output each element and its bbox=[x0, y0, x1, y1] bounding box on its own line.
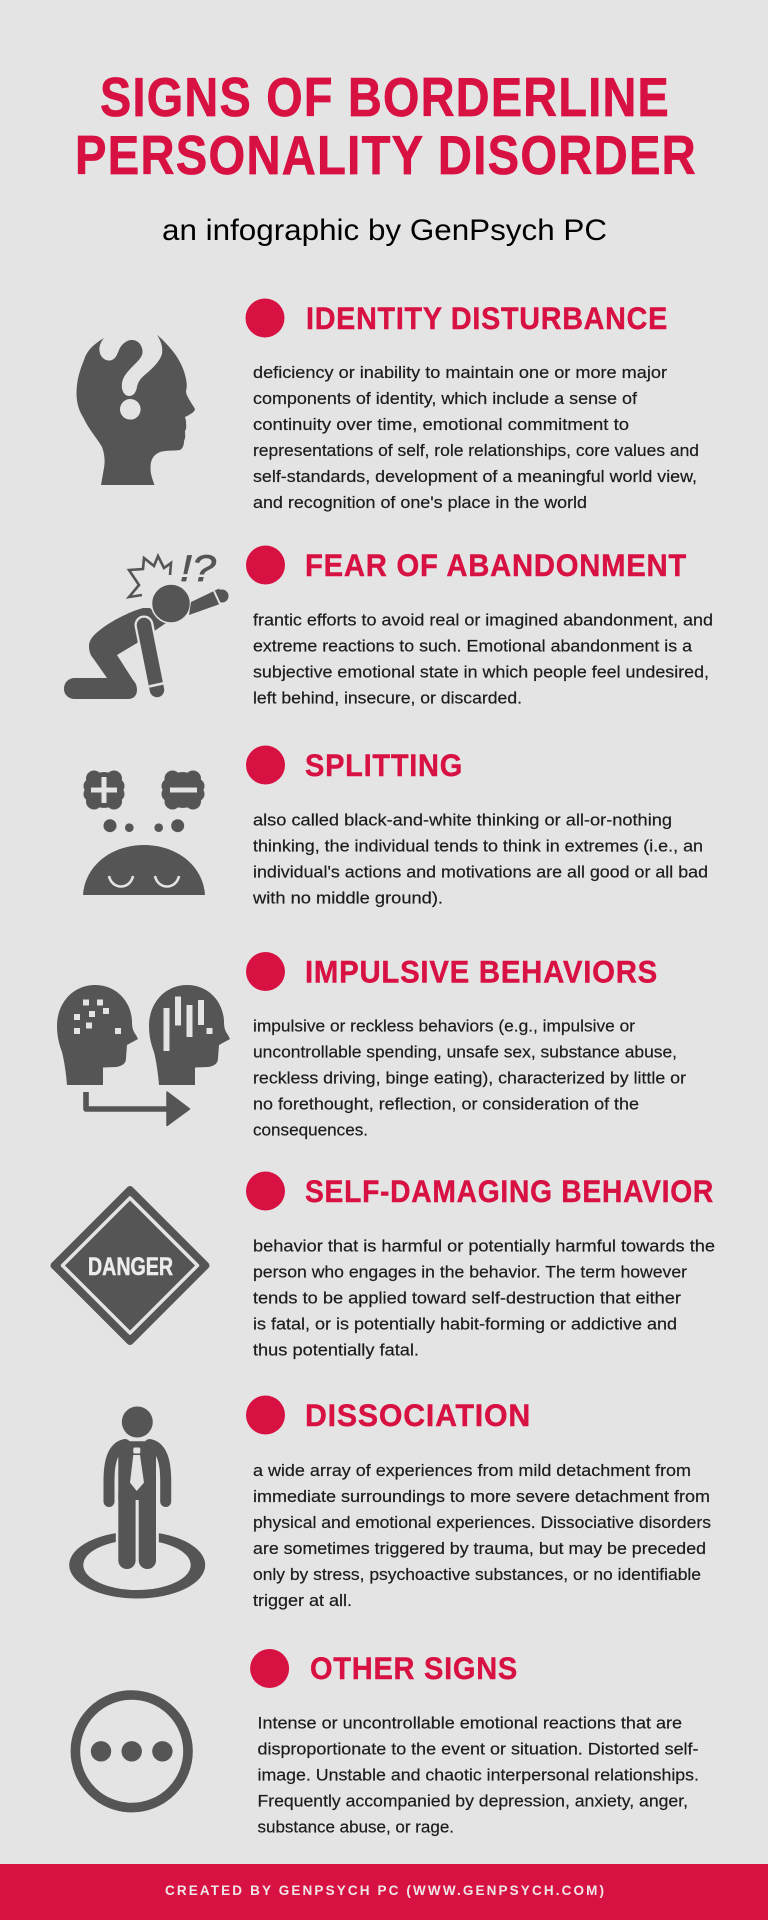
body text: immediate surroundings to more severe detachment from bbox=[253, 1487, 710, 1506]
body text: frantic efforts to avoid real or imagined abandonment, and bbox=[253, 610, 713, 630]
body text: reckless driving, binge eating), characterized by little or bbox=[253, 1068, 686, 1088]
heading: IMPULSIVE BEHAVIORS bbox=[305, 954, 658, 990]
title: SIGNS OF BORDERLINE bbox=[100, 66, 670, 128]
panel: splitting bbox=[83, 746, 708, 908]
body text: only by stress, psychoactive substances, or no identifiable bbox=[253, 1565, 701, 1584]
body text: individual's actions and motivations are all good or all bad bbox=[253, 862, 708, 882]
icon: kneeling person with exclamation bbox=[64, 548, 228, 699]
body text: is fatal, or is potentially habit-forming or addictive and bbox=[253, 1314, 677, 1334]
body text bbox=[253, 363, 699, 512]
body text bbox=[253, 1461, 711, 1610]
body text: thus potentially fatal. bbox=[253, 1340, 419, 1360]
icon: two heads with arrow bbox=[57, 985, 230, 1126]
body text bbox=[253, 610, 713, 708]
heading: SELF-DAMAGING BEHAVIOR bbox=[305, 1173, 714, 1209]
panel: self-damaging behavior bbox=[54, 1172, 715, 1360]
body text: tends to be applied toward self-destruction that either bbox=[253, 1288, 681, 1308]
bullet bbox=[246, 546, 285, 584]
body text: self-standards, development of a meaningful world view, bbox=[253, 467, 697, 486]
body text: extreme reactions to such. Emotional abandonment is a bbox=[253, 636, 693, 656]
heading: SPLITTING bbox=[305, 747, 463, 783]
footer bar: CREATED BY GENPSYCH PC (WWW.GENPSYCH.COM) bbox=[165, 1883, 604, 1898]
body text: physical and emotional experiences. Dissociative disorders bbox=[253, 1513, 711, 1532]
body text bbox=[258, 1714, 699, 1836]
body text: and recognition of one's place in the world bbox=[253, 493, 587, 512]
body text bbox=[252, 810, 708, 908]
panel: impulsive behaviors bbox=[57, 952, 686, 1140]
body text: are sometimes triggered by trauma, but may be preceded bbox=[253, 1539, 706, 1558]
body text: components of identity, which include a sense of bbox=[253, 389, 637, 408]
bullet bbox=[246, 1172, 285, 1210]
icon: face with plus and minus thoughts bbox=[83, 770, 205, 895]
body text: person who engages in the behavior. The term however bbox=[253, 1262, 687, 1282]
panel: fear of abandonment bbox=[64, 546, 713, 708]
body text: image. Unstable and chaotic interpersonal relationships. bbox=[258, 1766, 699, 1784]
body text: a wide array of experiences from mild detachment from bbox=[253, 1461, 691, 1480]
panel: identity disturbance bbox=[76, 298, 699, 512]
heading: DISSOCIATION bbox=[305, 1397, 531, 1433]
body text: deficiency or inability to maintain one or more major bbox=[253, 363, 667, 382]
body text: Frequently accompanied by depression, anxiety, anger, bbox=[258, 1792, 688, 1810]
subtitle: an infographic by GenPsych PC bbox=[162, 214, 607, 247]
body text: with no middle ground). bbox=[252, 888, 443, 908]
icon: man standing in ring bbox=[69, 1406, 205, 1598]
footer bar bbox=[0, 1864, 768, 1920]
panel: other signs bbox=[75, 1649, 699, 1836]
icon: danger sign bbox=[54, 1190, 206, 1342]
body text: substance abuse, or rage. bbox=[258, 1818, 454, 1836]
body text: disproportionate to the event or situation. Distorted self- bbox=[258, 1740, 698, 1758]
body text: trigger at all. bbox=[253, 1591, 352, 1610]
body text bbox=[253, 1016, 686, 1140]
icon: kneeling person with exclamation: !? bbox=[180, 548, 216, 589]
body text bbox=[253, 1236, 715, 1360]
body text: left behind, insecure, or discarded. bbox=[253, 688, 522, 708]
icon: danger sign: DANGER bbox=[88, 1253, 173, 1281]
body text: representations of self, role relationships, core values and bbox=[253, 441, 699, 460]
body text: Intense or uncontrollable emotional reactions that are bbox=[258, 1714, 682, 1732]
body text: impulsive or reckless behaviors (e.g., impulsive or bbox=[253, 1016, 635, 1036]
panel: dissociation bbox=[69, 1396, 711, 1610]
bullet bbox=[246, 298, 284, 338]
body text: behavior that is harmful or potentially harmful towards the bbox=[253, 1236, 715, 1256]
body text: thinking, the individual tends to think in extremes (i.e., an bbox=[253, 836, 703, 856]
title bbox=[75, 66, 697, 186]
heading: IDENTITY DISTURBANCE bbox=[306, 300, 668, 336]
body text: also called black-and-white thinking or all-or-nothing bbox=[253, 810, 672, 830]
icon: head with question mark bbox=[76, 330, 195, 485]
heading: FEAR OF ABANDONMENT bbox=[305, 547, 687, 583]
body text: continuity over time, emotional commitment to bbox=[253, 415, 629, 434]
body text: subjective emotional state in which people feel undesired, bbox=[253, 662, 709, 682]
bullet bbox=[246, 952, 285, 991]
body text: no forethought, reflection, or consideration of the bbox=[253, 1094, 639, 1114]
bullet bbox=[246, 746, 285, 784]
icon: circle with three dots bbox=[75, 1695, 188, 1808]
heading: OTHER SIGNS bbox=[310, 1650, 518, 1686]
bullet bbox=[246, 1396, 285, 1434]
body text: uncontrollable spending, unsafe sex, substance abuse, bbox=[253, 1042, 677, 1062]
bullet bbox=[250, 1649, 289, 1688]
body text: consequences. bbox=[253, 1120, 368, 1140]
